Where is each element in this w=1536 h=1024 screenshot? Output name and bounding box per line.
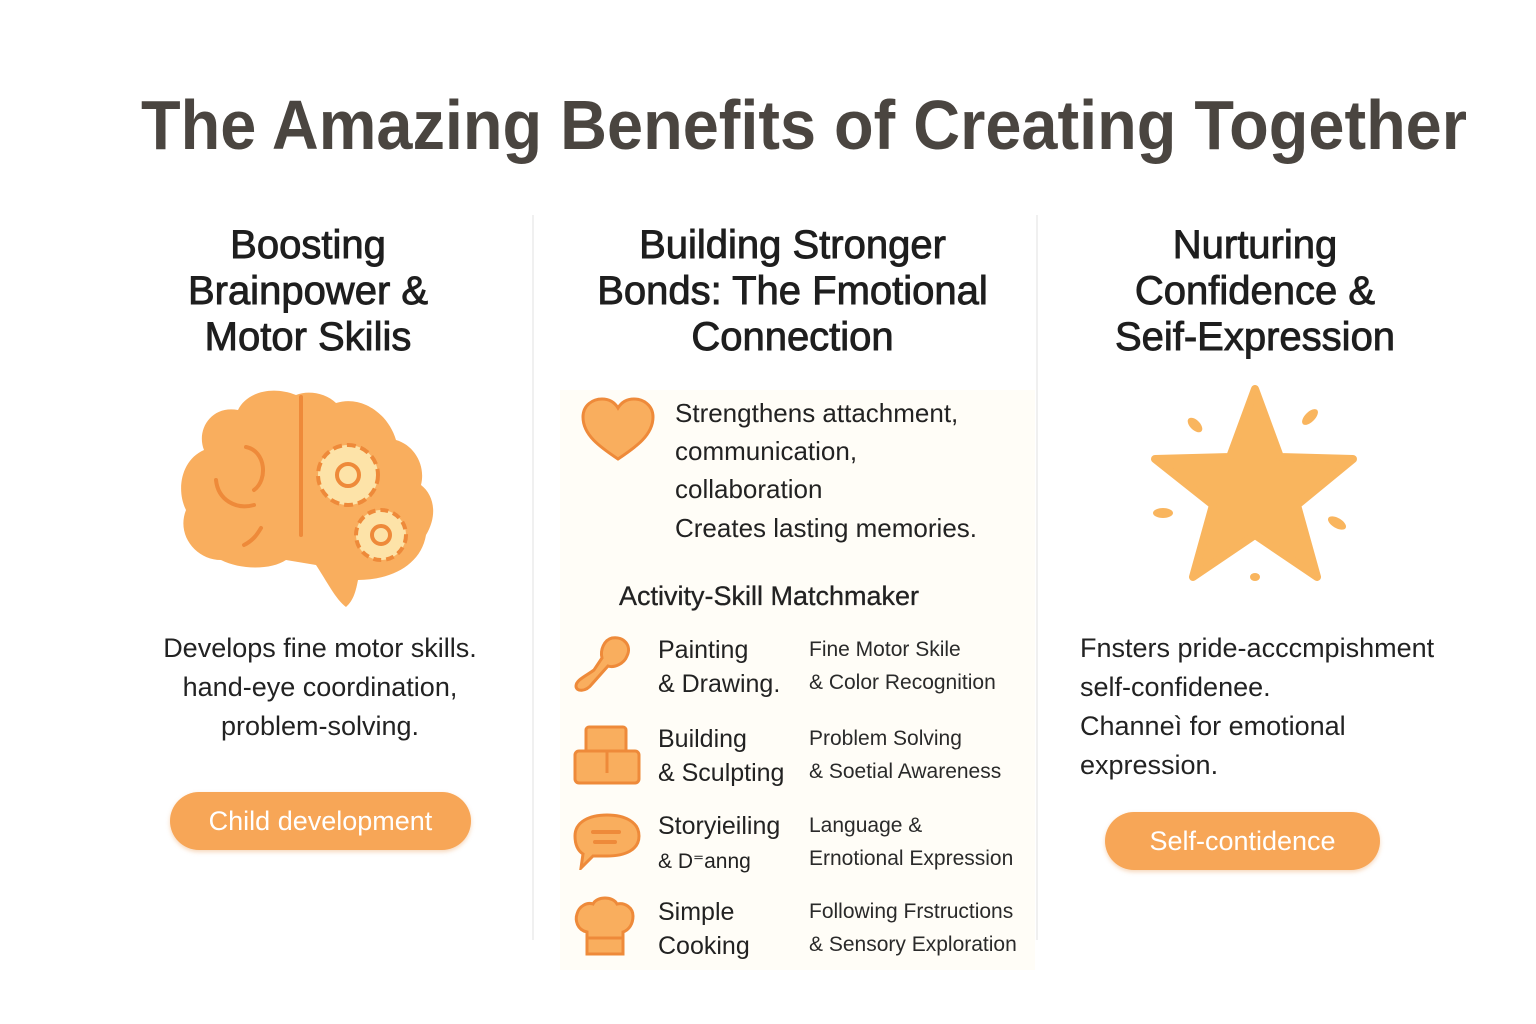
heading: bonds: Bonds: The Fmotional xyxy=(597,269,988,313)
text: Problem Solving xyxy=(809,727,962,750)
text: brainpower benefits: problem-solving. xyxy=(221,711,419,741)
text: confidence benefits: self-confidenee. xyxy=(1080,672,1271,702)
text: brainpower benefits xyxy=(163,633,477,741)
heading: confidence xyxy=(1115,223,1395,359)
text: brainpower benefits: hand-eye coordination, xyxy=(183,672,457,702)
heading: activity-skill matchmaker: Activity-Skill Matchmaker xyxy=(619,581,919,611)
row: storytelling xyxy=(658,812,780,873)
text: Following Frstructions xyxy=(809,900,1013,923)
row: building xyxy=(658,725,784,787)
text: bond benefits: communication, xyxy=(675,436,857,466)
row: storytelling: Storyieiling xyxy=(658,812,780,840)
icon: brain with gears xyxy=(181,390,434,607)
panel: confidence xyxy=(1115,223,1395,581)
row: storytelling: & D⁼anng xyxy=(658,850,751,873)
icon: heart xyxy=(582,398,654,461)
icon: paintbrush xyxy=(574,636,630,692)
text: confidence benefits xyxy=(1080,633,1434,780)
text: bond benefits: Strengthens attachment, xyxy=(675,398,958,428)
heading: bonds: Connection xyxy=(691,315,894,359)
heading: brainpower: Motor Skilis xyxy=(205,315,411,359)
row: painting: Painting xyxy=(658,636,748,664)
row: building: & Sculpting xyxy=(658,759,784,787)
row: cooking: Simple xyxy=(658,898,734,926)
text: Language & xyxy=(809,814,922,837)
button: child development xyxy=(170,792,471,850)
button: child development: Child development xyxy=(209,806,432,836)
text: confidence benefits: Channeì for emotional xyxy=(1080,711,1346,741)
heading: brainpower: Brainpower & xyxy=(188,269,428,313)
heading: confidence: Nurturing xyxy=(1173,223,1337,267)
heading: bonds: Building Stronger xyxy=(639,223,946,267)
heading: brainpower: Boosting xyxy=(230,223,386,267)
row: cooking xyxy=(658,898,750,960)
button: self-confidence xyxy=(1105,812,1380,870)
text: bond benefits: collaboration xyxy=(675,474,822,504)
panel: emotional connection xyxy=(582,223,988,611)
icon: chef hat xyxy=(574,896,634,956)
heading: brainpower xyxy=(188,223,428,359)
row: cooking: Cooking xyxy=(658,932,750,960)
heading: confidence: Seif-Expression xyxy=(1115,315,1395,359)
text: & Color Recognition xyxy=(809,671,996,694)
text: & Sensory Exploration xyxy=(809,933,1017,956)
text: confidence benefits: expression. xyxy=(1080,750,1218,780)
panel: brainpower xyxy=(181,223,434,607)
icon: speech bubble xyxy=(574,814,640,870)
row: painting xyxy=(658,636,780,698)
text: & Soetial Awareness xyxy=(809,760,1001,783)
icon: blocks xyxy=(574,726,640,784)
text: Ernotional Expression xyxy=(809,847,1013,870)
icon: star with sparkles xyxy=(1151,385,1357,581)
title: The Amazing Benefits of Creating Together xyxy=(141,86,1467,164)
button: self-confidence: Self-contidence xyxy=(1149,826,1336,856)
text: bond benefits xyxy=(675,398,977,543)
text: brainpower benefits: Develops fine motor skills. xyxy=(163,633,477,663)
text: confidence benefits: Fnsters pride-acccmpishment xyxy=(1080,633,1434,663)
heading: bonds xyxy=(597,223,988,359)
text: Fine Motor Skile xyxy=(809,638,961,661)
row: painting: & Drawing. xyxy=(658,670,780,698)
heading: confidence: Confidence & xyxy=(1135,269,1375,313)
row: building: Building xyxy=(658,725,747,753)
text: bond benefits: Creates lasting memories. xyxy=(675,513,977,543)
